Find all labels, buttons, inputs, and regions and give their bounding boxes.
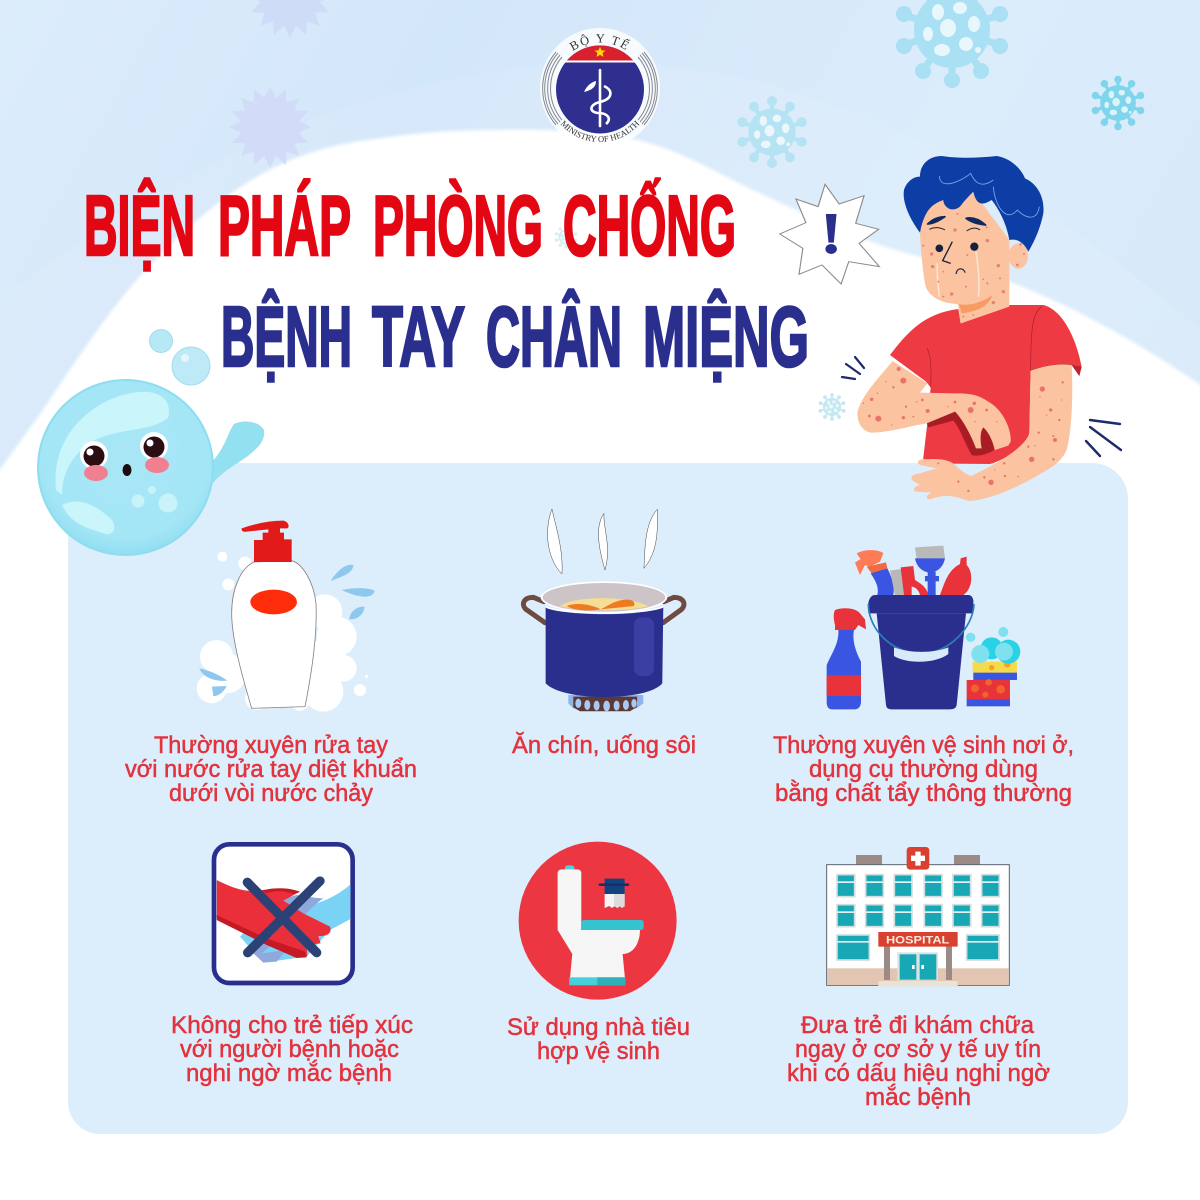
caption: avoid contact: Không cho trẻ tiếp xúc [171, 1012, 413, 1039]
icon: hospital [827, 847, 1009, 986]
caption: hand washing [125, 732, 417, 807]
logo: Ministry of Health: MINISTRY OF HEALTH [560, 120, 640, 142]
caption: hygienic toilet: Sử dụng nhà tiêu [507, 1014, 690, 1041]
icon: cleaning bucket [827, 546, 1020, 709]
bubble mascot [38, 330, 264, 555]
icon: toilet [519, 842, 677, 1000]
logo: Ministry of Health [540, 28, 660, 142]
scratching arm and hand [857, 361, 1011, 450]
caption: hygienic toilet [507, 1014, 690, 1065]
caption: cleaning: dụng cụ thường dùng [809, 756, 1038, 783]
icon: hospital: HOSPITAL [886, 935, 950, 947]
title line 1: PHÁP [218, 179, 351, 274]
caption: avoid contact: nghi ngờ mắc bệnh [186, 1060, 392, 1087]
caption: hand washing: dưới vòi nước chảy [169, 780, 373, 807]
title line 2: TAY [372, 290, 465, 385]
caption: hand washing: với nước rửa tay diệt khuẩn [125, 756, 417, 783]
title line 2: CHÂN [486, 289, 622, 385]
motion lines right [1086, 420, 1121, 456]
virus: small right [1092, 76, 1144, 130]
caption: see a doctor: mắc bệnh [865, 1084, 971, 1111]
rash spots on face [922, 213, 1025, 318]
title line 1: BIỆN [84, 178, 195, 274]
rash spots on arms [863, 367, 1064, 492]
title line 2: BỆNH [221, 289, 352, 385]
caption: hygienic toilet: hợp vệ sinh [537, 1038, 660, 1065]
caption: see a doctor: Đưa trẻ đi khám chữa [801, 1012, 1035, 1039]
face [920, 192, 1009, 304]
facial features [928, 217, 986, 297]
title line 1 [84, 178, 736, 274]
right arm and hand [911, 364, 1072, 501]
caption: cleaning: Thường xuyên vệ sinh nơi ở, [773, 732, 1074, 759]
icon: cooking pot [523, 509, 684, 711]
motion lines left [842, 357, 864, 379]
panel: measures [68, 463, 1128, 1134]
caption: cleaning [773, 732, 1074, 807]
caption: cleaning: bằng chất tẩy thông thường [775, 780, 1072, 807]
man body with rash [857, 300, 1082, 501]
shirt [890, 305, 1082, 464]
caption: eat cooked food: Ăn chín, uống sôi [512, 732, 696, 759]
virus: faint behind title [555, 225, 577, 249]
scratch marks [927, 412, 994, 456]
caption: see a doctor [787, 1012, 1050, 1111]
exclamation burst [780, 184, 879, 284]
title line 2: MIỆNG [643, 289, 809, 385]
virus: large top right [896, 0, 1008, 88]
caption: avoid contact [171, 1012, 413, 1087]
title line 2 [221, 289, 809, 385]
spiky virus: left [229, 86, 311, 168]
man head [904, 156, 1044, 323]
hair [904, 156, 1044, 252]
title line 1: PHÒNG [373, 179, 543, 274]
spiky virus: top [248, 0, 332, 38]
icon: no handshake [214, 844, 353, 983]
caption: hand washing: Thường xuyên rửa tay [154, 732, 388, 759]
neck [957, 300, 1009, 323]
caption: see a doctor: khi có dấu hiệu nghi ngờ [787, 1060, 1050, 1087]
logo: Ministry of Health: BỘ Y TẾ [569, 34, 631, 51]
virus: faint near arm [819, 393, 845, 421]
ear [1009, 243, 1028, 269]
caption: avoid contact: với người bệnh hoặc [180, 1036, 399, 1063]
icon: hand wash bottle [197, 521, 375, 712]
caption: see a doctor: ngay ở cơ sở y tế uy tín [795, 1036, 1041, 1063]
neck shadow [959, 283, 1009, 323]
virus: middle [737, 96, 807, 168]
title line 1: CHỐNG [563, 178, 736, 274]
